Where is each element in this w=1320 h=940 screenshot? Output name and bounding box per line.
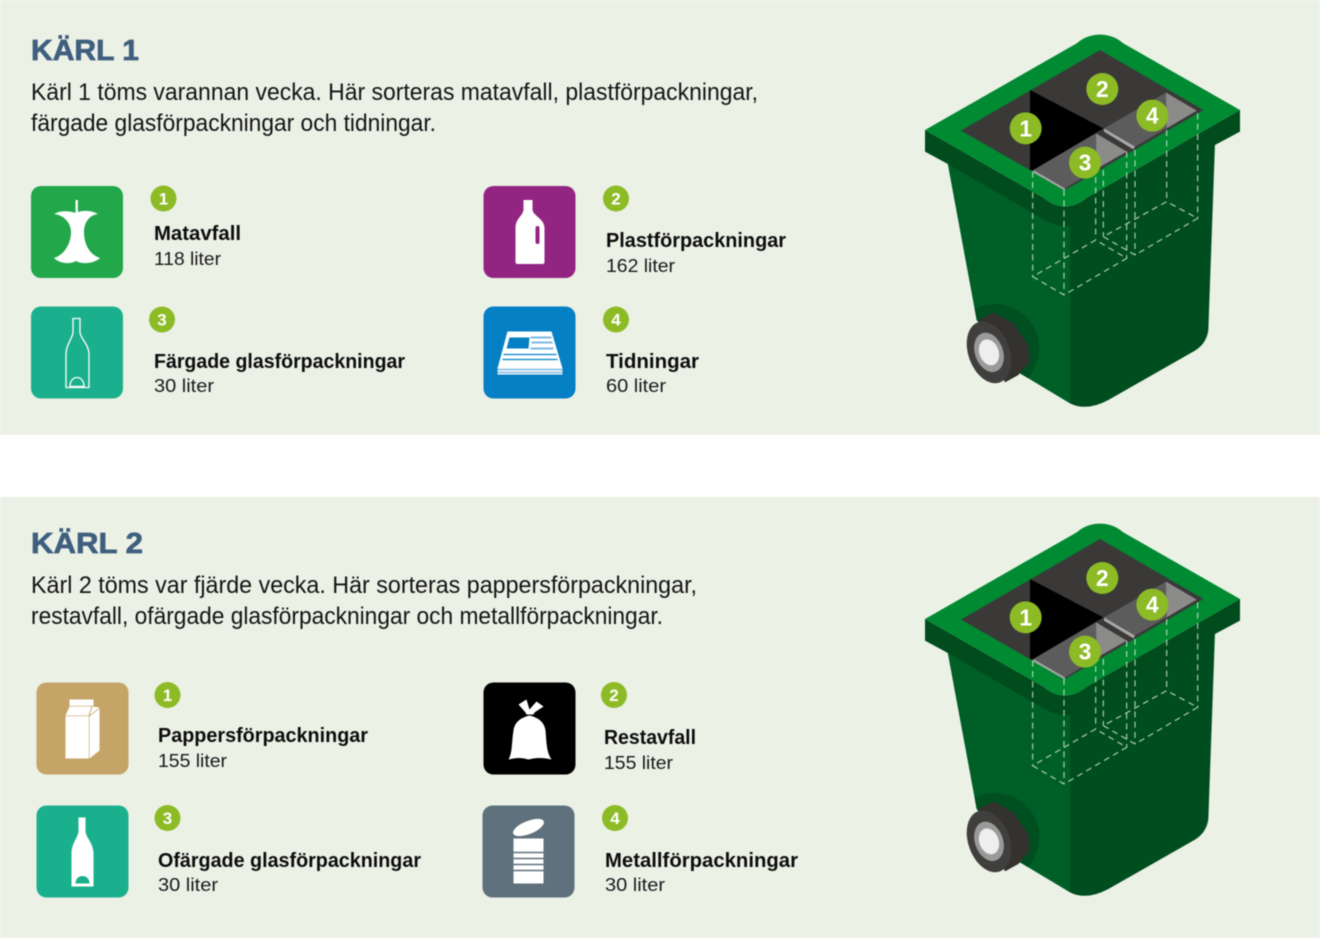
icon: rubbish bag xyxy=(484,682,576,774)
label: Pappersförpackningar: 155 liter xyxy=(158,750,227,771)
badge: 3 xyxy=(149,306,175,332)
label: Matavfall xyxy=(154,223,241,269)
badge: 4: 4 xyxy=(611,310,621,330)
text block: Kärl 1 intro xyxy=(31,79,758,137)
label: Metallförpackningar: Metallförpackningar xyxy=(605,850,798,872)
label: Pappersförpackningar: Pappersförpackningar xyxy=(158,725,368,747)
illustration: bin 2 xyxy=(925,524,1240,896)
text block: Kärl 1 intro: Kärl 1 töms varannan vecka. Här sorteras matavfall, plastförpackningar, xyxy=(31,79,758,106)
badge: 3 xyxy=(154,805,180,831)
label: Ofärgade glasförpackningar xyxy=(158,850,421,895)
heading: Kärl 2: KÄRL 2 xyxy=(31,527,143,560)
bin badges: 1 xyxy=(1019,604,1032,630)
bin badges: 4 xyxy=(1146,592,1159,618)
heading: Kärl 1: KÄRL 1 xyxy=(31,34,139,67)
icon: glass bottle outline xyxy=(31,306,123,398)
badge: 4 xyxy=(602,805,628,831)
label: Plastförpackningar: 162 liter xyxy=(606,255,675,276)
badge: 3: 3 xyxy=(163,809,172,828)
label: Plastförpackningar: Plastförpackningar xyxy=(606,230,786,252)
label: Färgade glasförpackningar xyxy=(154,351,405,396)
bin badges: 2 xyxy=(1096,565,1109,591)
bin badges: 1 xyxy=(1019,115,1032,141)
bin badges xyxy=(1010,562,1168,668)
icon: plastic bottle xyxy=(484,186,576,278)
icon: newspaper xyxy=(484,306,576,398)
label: Ofärgade glasförpackningar: 30 liter xyxy=(158,874,218,895)
text block: Kärl 1 intro: färgade glasförpackningar och tidningar. xyxy=(31,110,436,137)
bin badges: 3 xyxy=(1079,150,1091,176)
icon: milk carton xyxy=(36,682,128,774)
label: Metallförpackningar: 30 liter xyxy=(605,874,665,895)
label: Färgade glasförpackningar: 30 liter xyxy=(154,375,214,396)
badge: 1 xyxy=(154,682,180,708)
icon: glass bottle solid xyxy=(36,806,128,898)
label: Metallförpackningar xyxy=(605,850,798,895)
text block: Kärl 2 intro: Kärl 2 töms var fjärde vecka. Här sorteras pappersförpackningar, xyxy=(31,572,697,599)
badge: 1: 1 xyxy=(163,686,172,705)
label: Tidningar: Tidningar xyxy=(606,351,699,373)
badge: 3: 3 xyxy=(157,310,167,330)
label: Matavfall: 118 liter xyxy=(154,248,221,269)
badge: 2: 2 xyxy=(611,190,621,208)
bin badges xyxy=(1010,73,1168,179)
bin badges: 4 xyxy=(1146,103,1159,129)
panel: Kärl 2 xyxy=(0,497,1320,938)
panel: Kärl 1 xyxy=(0,0,1320,435)
badge: 2: 2 xyxy=(609,686,619,705)
label: Ofärgade glasförpackningar: Ofärgade glasförpackningar xyxy=(158,850,421,872)
bin badges: 3 xyxy=(1079,639,1091,665)
badge: 4 xyxy=(603,306,629,332)
label: Plastförpackningar xyxy=(606,230,786,276)
label: Tidningar: 60 liter xyxy=(606,375,666,396)
label: Pappersförpackningar xyxy=(158,725,368,771)
label: Restavfall xyxy=(604,727,696,773)
label: Färgade glasförpackningar: Färgade glasförpackningar xyxy=(154,351,405,373)
label: Restavfall: Restavfall xyxy=(604,727,696,749)
text block: Kärl 2 intro xyxy=(31,572,697,630)
badge: 1: 1 xyxy=(159,190,168,208)
text block: Kärl 2 intro: restavfall, ofärgade glasförpackningar och metallförpackningar. xyxy=(31,603,663,630)
bin badges: 2 xyxy=(1096,76,1109,102)
badge: 4: 4 xyxy=(610,809,620,828)
label: Tidningar xyxy=(606,351,699,396)
icon: metal can xyxy=(482,806,574,898)
label: Matavfall: Matavfall xyxy=(154,223,241,245)
icon: apple core xyxy=(31,186,123,278)
badge: 1 xyxy=(150,186,176,212)
illustration: bin 1 xyxy=(925,35,1240,407)
badge: 2 xyxy=(601,682,627,708)
badge: 2 xyxy=(603,186,629,212)
label: Restavfall: 155 liter xyxy=(604,752,673,773)
